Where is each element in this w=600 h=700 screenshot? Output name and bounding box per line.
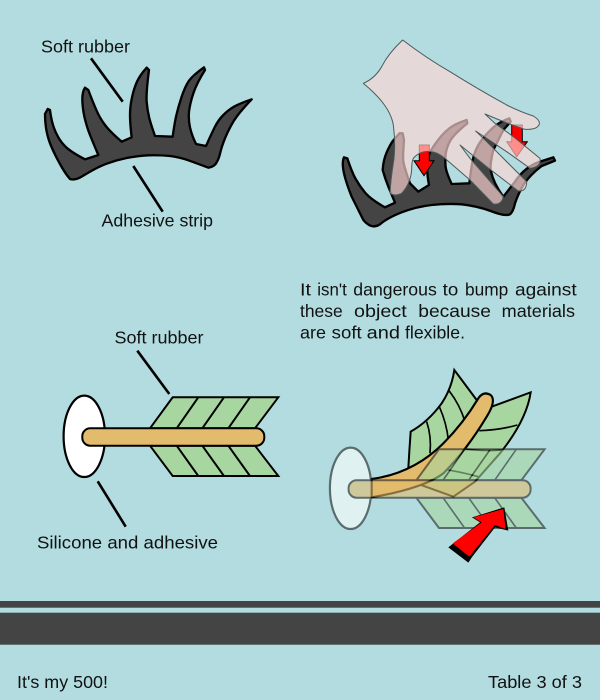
upper feather bbox=[150, 397, 278, 428]
text block: explanation: against bbox=[515, 280, 577, 300]
ghost of original bumper bbox=[330, 448, 545, 529]
text block: explanation: to bbox=[443, 280, 458, 300]
shaft bbox=[82, 428, 264, 446]
red arrow: finger press bbox=[507, 125, 527, 157]
footer note: left: It's my 500! bbox=[17, 672, 108, 692]
panel: rubber strip diagram bbox=[41, 37, 252, 231]
footer note: right: Table 3 of 3 bbox=[488, 672, 582, 692]
leader line: silicone bbox=[98, 481, 126, 527]
text block: explanation: isn't bbox=[317, 280, 347, 300]
deformed rubber strip bbox=[343, 118, 555, 226]
panel: arrow-shaped bumper diagram bbox=[37, 328, 278, 552]
translucent hand bbox=[363, 40, 540, 204]
text block: explanation: are bbox=[300, 322, 326, 342]
text block: explanation: materials bbox=[502, 301, 575, 321]
red arrow: thumb press bbox=[414, 145, 434, 176]
text block: explanation: bump bbox=[465, 280, 508, 300]
bent lower feather bbox=[418, 392, 531, 497]
panel: bent bumper with ghost bbox=[330, 370, 545, 563]
text block: explanation: It bbox=[300, 280, 311, 300]
label: soft rubber: Soft rubber bbox=[114, 328, 204, 348]
footer bars bbox=[0, 601, 600, 645]
label: soft rubber: Soft rubber bbox=[41, 37, 130, 57]
text block: explanation: these bbox=[300, 301, 343, 321]
label: silicone and adhesive: Silicone and adhesive bbox=[37, 532, 218, 552]
leader line: soft rubber bbox=[137, 351, 169, 394]
label: adhesive strip: Adhesive strip bbox=[102, 210, 213, 230]
text block: explanation: dangerous bbox=[353, 280, 437, 300]
leader line: soft rubber bbox=[91, 58, 123, 102]
text block: explanation: and bbox=[367, 322, 400, 342]
text block: explanation: because bbox=[418, 301, 491, 321]
red impact arrow bbox=[448, 507, 508, 563]
bent shaft bbox=[372, 393, 493, 497]
panel: hand pressing rubber strip bbox=[343, 40, 555, 226]
leader line: adhesive strip bbox=[133, 166, 163, 212]
text block: explanation: flexible. bbox=[405, 322, 465, 342]
bent upper feather bbox=[408, 370, 477, 473]
rubber strip shape bbox=[45, 67, 252, 179]
lower feather bbox=[150, 446, 278, 476]
text block: explanation: object bbox=[354, 301, 407, 321]
silicone disc bbox=[64, 396, 105, 477]
text block: explanation: soft bbox=[332, 322, 362, 342]
